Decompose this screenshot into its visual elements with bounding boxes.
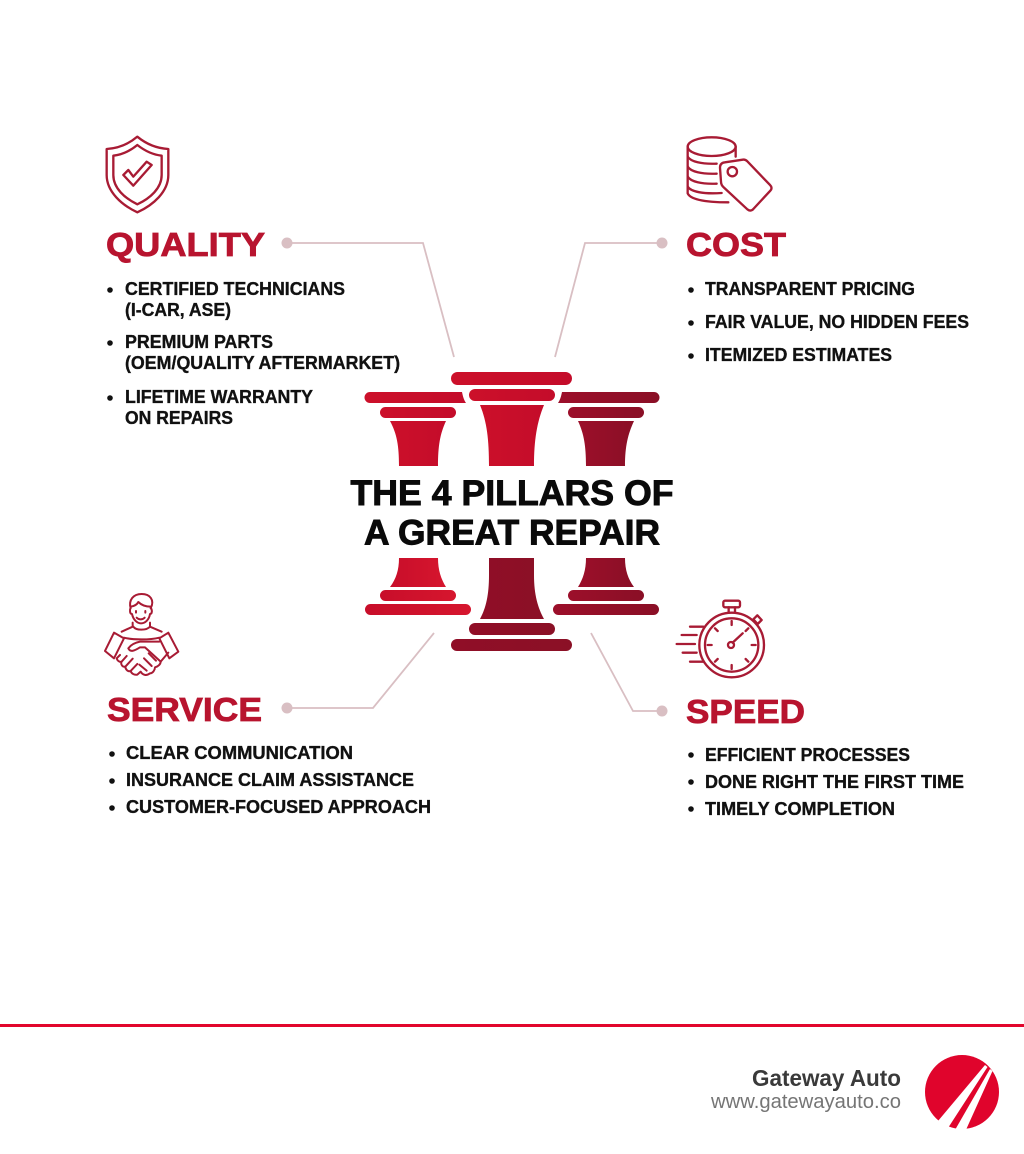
title: THE 4 PILLARS OF [350,474,674,513]
heading: cost: COST [686,226,786,263]
list: cost [688,279,969,365]
pillar capital: right [558,392,660,466]
list: speed: TIMELY COMPLETION [705,799,895,819]
panel: cost [555,137,969,365]
pillar base: center [451,558,572,651]
list: service: CLEAR COMMUNICATION [126,743,353,763]
connector: service [282,633,434,714]
list: quality: (I-CAR, ASE) [125,300,231,320]
list: service: INSURANCE CLAIM ASSISTANCE [126,770,414,790]
pillars graphic [364,372,660,651]
title: A GREAT REPAIR [364,514,660,552]
list: service [109,743,431,817]
heading: quality: QUALITY [106,226,265,263]
list: service: CUSTOMER-FOCUSED APPROACH [126,797,431,817]
logo: road circle [925,1055,999,1132]
connector: cost [555,238,668,357]
connector: speed [591,633,668,716]
list: quality: CERTIFIED TECHNICIANS [125,279,345,299]
list: speed: EFFICIENT PROCESSES [705,745,910,765]
icon: stopwatch [677,601,764,677]
list: quality: LIFETIME WARRANTY [125,387,313,407]
pillar capital: center [451,372,572,466]
list: cost: FAIR VALUE, NO HIDDEN FEES [705,312,969,332]
list: speed [688,745,964,819]
footer brand text [710,1065,901,1113]
footer brand text: Gateway Auto [752,1065,901,1091]
icon: coins and price tag [688,137,772,211]
heading: service: SERVICE [107,691,262,728]
panel: speed [591,601,964,819]
list: cost: TRANSPARENT PRICING [705,279,915,299]
list: cost: ITEMIZED ESTIMATES [705,345,892,365]
icon: shield [107,137,168,212]
connector: quality [282,238,454,357]
footer brand text: www.gatewayauto.co [710,1091,901,1113]
pillar capital: left [364,392,466,466]
list: quality: PREMIUM PARTS [125,332,273,352]
heading: speed: SPEED [686,693,805,730]
list: quality [107,279,400,428]
list: speed: DONE RIGHT THE FIRST TIME [705,772,964,792]
title [350,474,674,552]
icon: technician handshake [105,594,178,675]
pillar base: left [365,558,471,615]
footer divider [0,1024,1024,1027]
pillar base: right [553,558,659,615]
panel: quality [106,137,454,428]
list: quality: (OEM/QUALITY AFTERMARKET) [125,353,400,373]
panel: service [105,594,434,817]
list: quality: ON REPAIRS [125,408,233,428]
